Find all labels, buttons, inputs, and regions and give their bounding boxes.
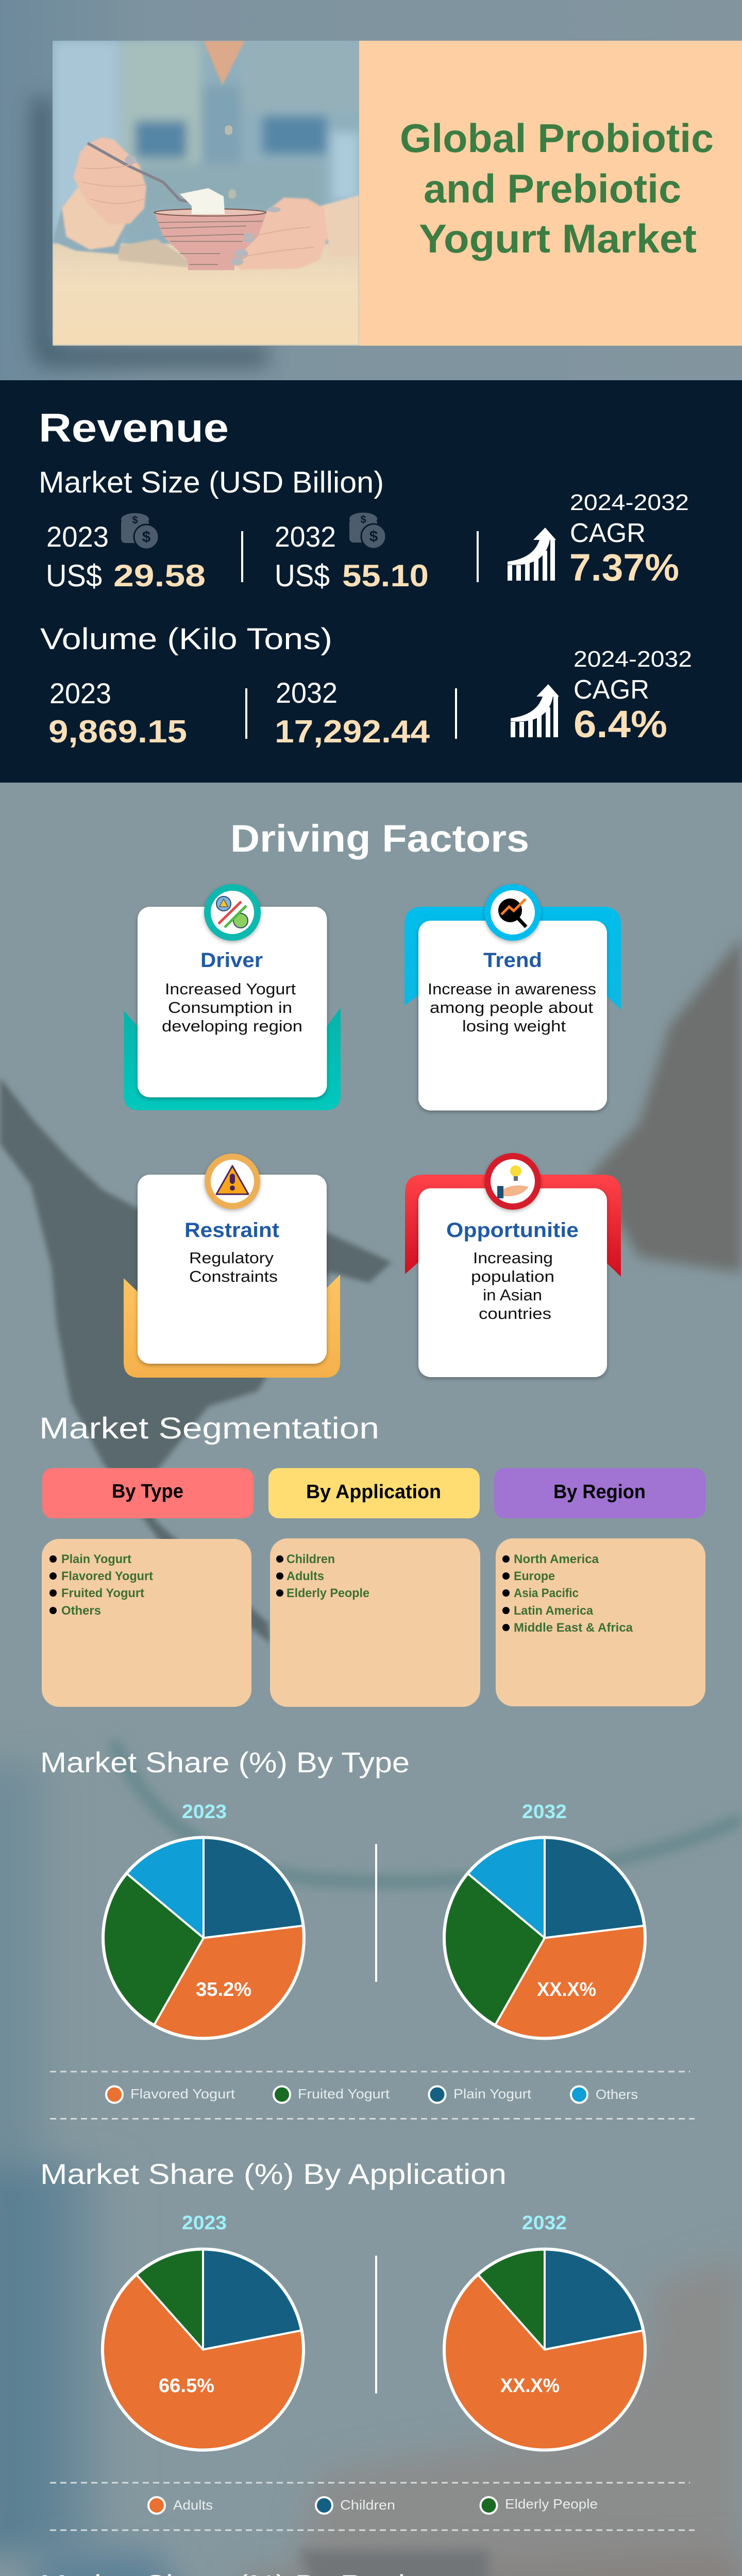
stat: 2032 volume: 17,292.44 bbox=[275, 714, 430, 750]
description: driver: Consumption in bbox=[168, 998, 292, 1016]
list: types: Plain Yogurt bbox=[61, 1552, 131, 1566]
year label: 2032: 2032 bbox=[522, 1801, 567, 1823]
heading: volume: Volume (Kilo Tons) bbox=[40, 622, 332, 656]
title bbox=[400, 115, 714, 261]
description: opportunitie bbox=[471, 1249, 554, 1323]
description: trend: among people about bbox=[430, 998, 593, 1016]
section: hero and revenue bbox=[0, 0, 742, 783]
list: applications: Elderly People bbox=[286, 1586, 369, 1600]
panel: segmentation by region bbox=[494, 1468, 705, 1706]
legend: application: Elderly People bbox=[505, 2496, 598, 2512]
legend: application: Children bbox=[340, 2497, 395, 2513]
list: applications: Adults bbox=[286, 1569, 324, 1583]
stat: 2032 market size: US$ bbox=[275, 558, 330, 593]
pie chart: application 2023: 66.5% bbox=[159, 2375, 214, 2397]
legend: type: Flavored Yogurt bbox=[130, 2086, 235, 2102]
icon: coins 2032: $ bbox=[360, 514, 366, 526]
list: types: Flavored Yogurt bbox=[61, 1569, 153, 1583]
card: driver bbox=[124, 884, 341, 1110]
list: applications bbox=[276, 1552, 369, 1600]
pie chart: type 2032 bbox=[444, 1837, 645, 2039]
icon: driver gears and arrows bbox=[204, 884, 261, 941]
list: applications: Children bbox=[286, 1552, 335, 1566]
card: opportunitie bbox=[405, 1153, 621, 1377]
heading: revenue: Revenue bbox=[39, 405, 229, 450]
hero photo: hands with yogurt cup bbox=[53, 41, 359, 346]
stat: 2023 market size: 29.58 bbox=[113, 558, 206, 593]
heading: market share by application: Market Share (%) By Application bbox=[40, 2158, 507, 2190]
title: Global Probiotic bbox=[400, 115, 714, 161]
description: restraint: Regulatory bbox=[189, 1249, 274, 1267]
icon: coins 2023: $ bbox=[142, 529, 151, 546]
divider bbox=[477, 531, 479, 582]
stat: 2032 market size: 55.10 bbox=[342, 558, 429, 593]
list: regions: North America bbox=[514, 1552, 599, 1566]
year label: 2023: 2023 bbox=[182, 2212, 227, 2234]
stat: 2032 market size: 2032 bbox=[275, 520, 336, 553]
stat: 2023 volume: 2023 bbox=[49, 677, 111, 709]
pie chart: application 2023 bbox=[103, 2249, 303, 2450]
label: restraint: Restraint bbox=[184, 1219, 279, 1242]
header: by region: By Region bbox=[553, 1481, 646, 1503]
photo shadow bbox=[32, 98, 268, 367]
section: market share by type bbox=[0, 1738, 742, 2154]
heading: market share by type: Market Share (%) By Type bbox=[40, 1746, 410, 1778]
section: market share by application bbox=[0, 2154, 742, 2550]
stat: 2023 volume: 9,869.15 bbox=[48, 714, 187, 750]
stat: volume cagr: 6.4% bbox=[574, 703, 667, 745]
description: driver: developing region bbox=[162, 1017, 302, 1035]
stat: 2032 volume bbox=[275, 676, 430, 750]
year label: 2032: 2032 bbox=[522, 2212, 567, 2234]
stat: 2023 market size bbox=[46, 520, 206, 593]
label: driver: Driver bbox=[200, 949, 263, 972]
heading: driving factors: Driving Factors bbox=[230, 817, 529, 860]
icon: coins 2023: $ bbox=[132, 515, 138, 526]
stat: market size cagr bbox=[569, 490, 689, 589]
pie chart: application 2032: XX.X% bbox=[500, 2375, 560, 2397]
description: restraint bbox=[189, 1249, 278, 1285]
divider bbox=[375, 2256, 377, 2394]
year label: 2023: 2023 bbox=[182, 1801, 227, 1823]
legend: type: Others bbox=[596, 2087, 638, 2102]
panel: segmentation by application bbox=[268, 1468, 480, 1707]
stat: 2032 market size bbox=[275, 520, 429, 593]
label: trend: Trend bbox=[483, 949, 542, 972]
icon: trend magnifier bbox=[484, 884, 541, 941]
description: opportunitie: population bbox=[471, 1267, 554, 1285]
stat: volume cagr: CAGR bbox=[574, 675, 649, 705]
description: trend bbox=[428, 980, 596, 1035]
header: by application: By Application bbox=[306, 1481, 441, 1503]
stat: market size cagr: CAGR bbox=[570, 518, 646, 548]
list: types: Others bbox=[61, 1604, 101, 1618]
divider bbox=[241, 531, 243, 582]
list: types: Fruited Yogurt bbox=[61, 1586, 144, 1600]
title panel bbox=[359, 41, 742, 346]
legend: application: Adults bbox=[173, 2497, 213, 2513]
stat: volume cagr bbox=[574, 647, 692, 745]
list: regions: Asia Pacific bbox=[514, 1586, 579, 1600]
stat: volume cagr: 2024-2032 bbox=[574, 647, 692, 672]
description: opportunitie: in Asian bbox=[483, 1286, 542, 1304]
list: regions bbox=[502, 1552, 633, 1635]
pie chart: type 2023 bbox=[103, 1837, 304, 2039]
heading: market size: Market Size (USD Billion) bbox=[39, 466, 384, 499]
icon: growth chart bbox=[511, 684, 559, 737]
stat: 2023 market size: 2023 bbox=[46, 520, 109, 553]
stat: 2032 volume: 2032 bbox=[276, 676, 338, 709]
card: restraint bbox=[124, 1154, 340, 1378]
pie chart: application 2032 bbox=[444, 2249, 645, 2450]
pie chart: type 2032: XX.X% bbox=[537, 1979, 596, 2001]
title: Yogurt Market bbox=[419, 216, 697, 261]
panel: revenue bbox=[0, 380, 742, 783]
label: opportunitie: Opportunitie bbox=[446, 1219, 579, 1242]
stat: market size cagr: 7.37% bbox=[569, 546, 679, 589]
description: trend: Increase in awareness bbox=[428, 980, 596, 998]
icon: growth chart bbox=[508, 528, 556, 581]
divider bbox=[375, 1844, 377, 1982]
stat: market size cagr: 2024-2032 bbox=[570, 490, 689, 515]
list: regions: Middle East & Africa bbox=[514, 1621, 633, 1635]
pie chart: type 2023: 35.2% bbox=[196, 1979, 251, 2001]
legend: type: Plain Yogurt bbox=[453, 2086, 532, 2102]
section: driving factors bbox=[0, 817, 742, 1401]
list: regions: Latin America bbox=[514, 1604, 594, 1618]
icon: coins 2023 bbox=[121, 513, 159, 549]
description: opportunitie: Increasing bbox=[473, 1249, 553, 1267]
divider bbox=[455, 688, 457, 739]
icon: light bulb and hand bbox=[484, 1153, 541, 1210]
description: driver: Increased Yogurt bbox=[165, 980, 296, 998]
stat: 2023 market size: US$ bbox=[46, 558, 102, 593]
description: driver bbox=[162, 980, 302, 1035]
title: and Prebiotic bbox=[424, 166, 681, 211]
icon: warning triangle bbox=[205, 1154, 260, 1209]
description: opportunitie: countries bbox=[479, 1304, 551, 1323]
legend: type: Fruited Yogurt bbox=[298, 2086, 390, 2102]
legend: type bbox=[106, 2086, 638, 2103]
icon: coins 2032 bbox=[349, 513, 386, 549]
description: trend: losing weight bbox=[462, 1017, 566, 1035]
stat: 2023 volume bbox=[48, 677, 187, 750]
legend: application bbox=[148, 2496, 598, 2514]
heading: market segmentation: Market Segmentation bbox=[39, 1412, 379, 1445]
header: by type: By Type bbox=[112, 1481, 183, 1502]
list: types bbox=[49, 1552, 153, 1618]
panel: segmentation by type bbox=[42, 1468, 254, 1707]
section: market segmentation bbox=[39, 1401, 705, 1707]
icon: coins 2032: $ bbox=[369, 528, 378, 545]
card: trend bbox=[404, 884, 621, 1111]
divider bbox=[245, 688, 247, 739]
description: restraint: Constraints bbox=[189, 1267, 278, 1285]
list: regions: Europe bbox=[514, 1569, 555, 1583]
